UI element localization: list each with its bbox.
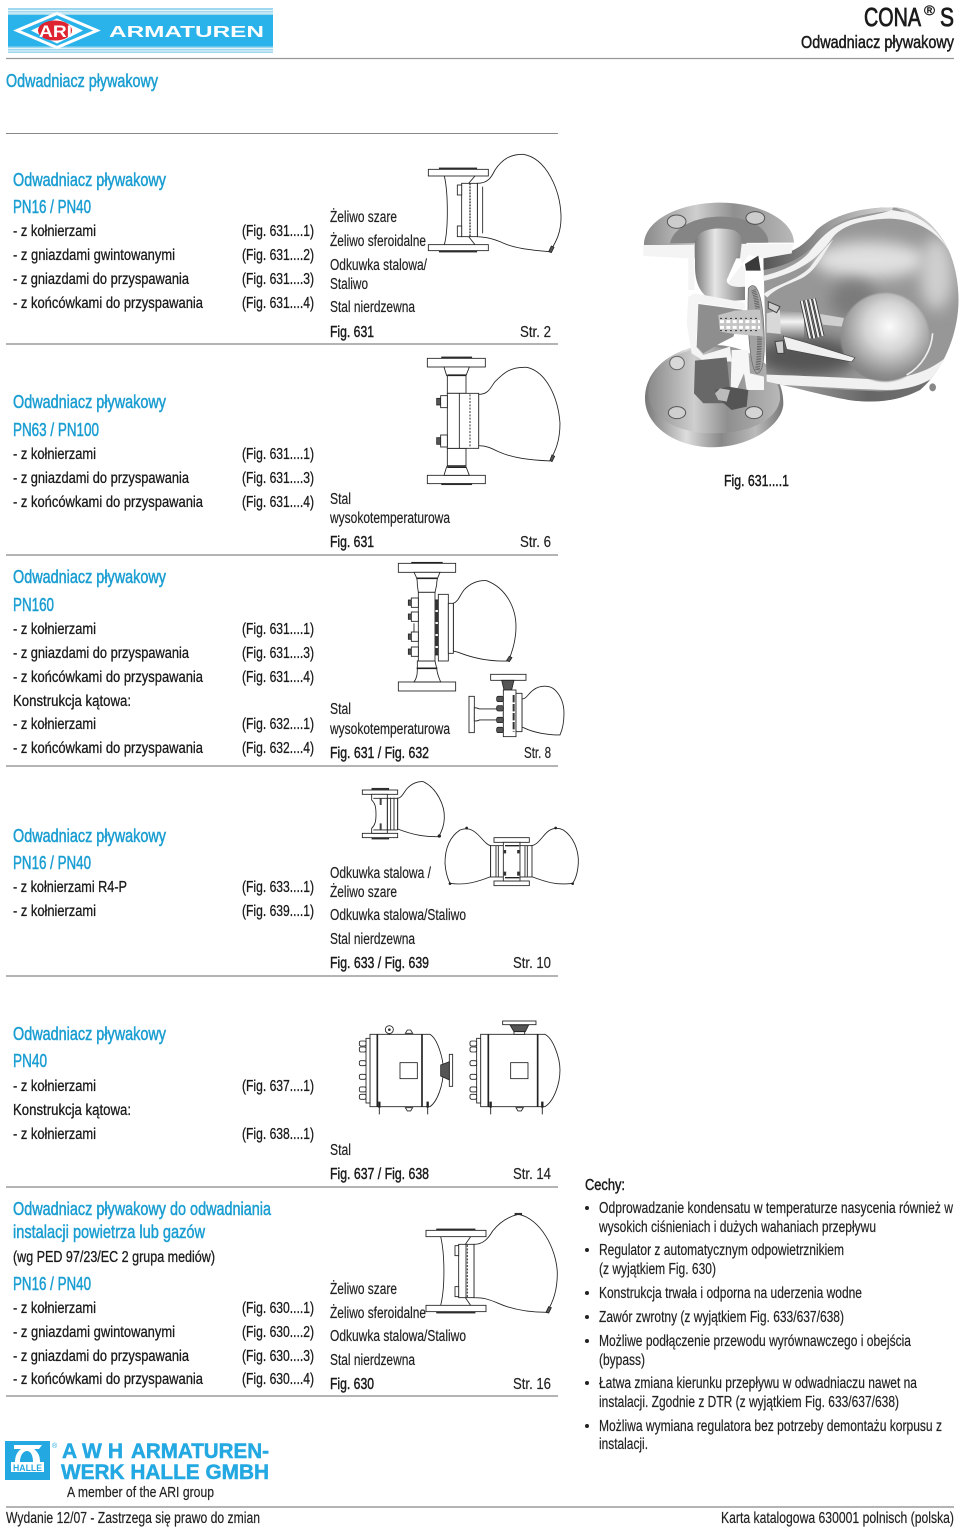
pressure class: PN16 / PN40 (13, 853, 91, 873)
header title: CONA (864, 2, 921, 32)
variants list: (Fig. 630....3) (242, 1348, 314, 1365)
variants list: - z gniazdami do przyspawania (13, 1348, 189, 1365)
feature: condensate (585, 1200, 954, 1236)
figure and page reference (330, 1166, 551, 1183)
figure and page reference (330, 324, 551, 341)
materials: wysokotemperaturowa (329, 721, 450, 738)
materials: Stal nierdzewna (330, 299, 415, 316)
heading: Odwadniacz pływakowy (13, 170, 166, 190)
logo: AWH Armaturenwerk Halle: AWH (62, 1440, 123, 1463)
feature: bypass (585, 1333, 911, 1369)
product photo: cutaway of float trap (643, 203, 960, 447)
heading: Odwadniacz pływakowy (13, 567, 166, 587)
divider plate (731, 350, 764, 390)
variants list (13, 446, 314, 511)
figure and page reference: Fig. 631 / Fig. 632 (330, 745, 429, 762)
variants list: (Fig. 631....3) (242, 271, 314, 288)
variants list: (Fig. 631....3) (242, 645, 314, 662)
panel: Fig. 630 air and gas drain (13, 1199, 557, 1393)
pressure class: PN40 (13, 1051, 47, 1071)
variants list: (Fig. 639....1) (242, 903, 314, 920)
materials: Stal (330, 491, 351, 508)
bulb upper outer wall (763, 207, 893, 270)
diagram: Fig. 631 high pressure outline (427, 357, 560, 485)
icon: Halle mark: HALLE (13, 1463, 42, 1473)
variants list: (Fig. 631....2) (242, 247, 314, 264)
variants list: (Fig. 630....2) (242, 1324, 314, 1341)
materials: Żeliwo szare (330, 883, 397, 901)
panel: PN16/PN40 Fig. 633/639 (13, 782, 578, 972)
feature: regulator replacement (585, 1418, 942, 1453)
figure and page reference (330, 955, 551, 972)
panel: PN16/PN40 Fig. 631 (13, 154, 561, 341)
variants list: - z kołnierzami (13, 903, 96, 920)
directive note: (wg PED 97/23/EC 2 grupa mediów) (13, 1249, 215, 1266)
variants list: (Fig. 638....1) (242, 1126, 314, 1143)
variants list (13, 223, 314, 312)
materials (329, 491, 450, 527)
variants list: - z końcówkami do przyspawania (13, 494, 203, 511)
figure and page reference: Fig. 631 (330, 324, 374, 341)
pressure class: PN63 / PN100 (13, 420, 99, 440)
variants list: - z gniazdami do przyspawania (13, 645, 189, 662)
diagram: Fig. 631 and Fig. 632 outlines (398, 562, 564, 737)
logo: ARI Armaturen (8, 8, 273, 53)
variants list: - z końcówkami do przyspawania (13, 669, 203, 686)
logo: AWH Armaturenwerk Halle: ARMATUREN- (131, 1440, 269, 1463)
variants list: - z końcówkami do przyspawania (13, 1371, 203, 1388)
variants list: (Fig. 637....1) (242, 1078, 314, 1095)
variants list: - z kołnierzami (13, 1078, 96, 1095)
materials: Odkuwka stalowa/Staliwo (330, 907, 466, 924)
variants list: - z kołnierzami (13, 1126, 96, 1143)
lower chamber wall (687, 293, 745, 362)
variants list: (Fig. 631....1) (242, 621, 314, 638)
feature: check valve: Zawór zwrotny (z wyjątkiem Fig. 633/637/638) (599, 1309, 844, 1326)
variants list: Konstrukcja kątowa: (13, 1102, 131, 1119)
feature: regulator: Regulator z automatycznym odpowietrznikiem (599, 1242, 844, 1259)
figure and page reference: Str. 2 (520, 324, 551, 341)
bellows (802, 299, 844, 338)
variants list: - z kołnierzami (13, 1300, 96, 1317)
pressure class: PN160 (13, 595, 54, 615)
variants list: - z kołnierzami R4-P (13, 879, 127, 896)
materials: Odkuwka stalowa/ (330, 257, 428, 274)
feature: regulator (585, 1242, 844, 1278)
photo caption: Fig. 631....1 (724, 473, 789, 490)
materials (330, 865, 466, 948)
materials: Staliwo (330, 276, 368, 293)
variants list: - z gniazdami do przyspawania (13, 470, 189, 487)
logo: AWH Armaturenwerk Halle: A member of the ARI group (67, 1484, 214, 1501)
feature: construction: Konstrukcja trwała i odporna na uderzenia wodne (599, 1285, 862, 1302)
features heading: Cechy: (585, 1177, 625, 1194)
variants list: (Fig. 630....1) (242, 1300, 314, 1317)
materials: Stal nierdzewna (330, 1352, 415, 1369)
materials (330, 1280, 466, 1369)
materials (329, 701, 450, 738)
variants list: (Fig. 630....4) (242, 1371, 314, 1388)
variants list: - z gniazdami gwintowanymi (13, 247, 175, 264)
variants list (13, 1300, 314, 1388)
variants list: - z gniazdami do przyspawania (13, 271, 189, 288)
figure and page reference: Str. 6 (520, 534, 551, 551)
bottom flange (645, 345, 783, 447)
diagram: Fig. 633 and Fig. 639 outlines (362, 782, 578, 886)
variants list: (Fig. 632....1) (242, 716, 314, 733)
figure and page reference: Str. 14 (513, 1166, 551, 1183)
feature: regulator: (z wyjątkiem Fig. 630) (599, 1261, 716, 1278)
strainer (718, 309, 763, 337)
icon: Halle mark: ® (52, 1442, 58, 1450)
heading (13, 1199, 272, 1242)
icon: Halle mark (5, 1441, 58, 1480)
float lever (783, 336, 855, 362)
variants list: - z kołnierzami (13, 621, 96, 638)
pressure class: PN16 / PN40 (13, 1274, 91, 1294)
variants list: Konstrukcja kątowa: (13, 693, 131, 710)
materials: Żeliwo sferoidalne (330, 232, 426, 250)
materials (330, 208, 428, 316)
diagram: Fig. 630 outline (426, 1213, 557, 1313)
bolts (768, 302, 784, 353)
variants list: - z kołnierzami (13, 223, 96, 240)
variants list: (Fig. 632....4) (242, 740, 314, 757)
panel: PN160 (13, 562, 564, 762)
inlet passage (695, 228, 745, 302)
header title: ® (924, 2, 936, 18)
diagram: Fig. 637 and Fig. 638 outlines (359, 1021, 560, 1114)
variants list: (Fig. 631....4) (242, 295, 314, 312)
feature: condensate: wysokich ciśnieniach i dużych wahaniach przepływu (598, 1219, 876, 1236)
figure and page reference (330, 745, 551, 762)
serrated disc (748, 286, 764, 373)
bulb white wall (764, 210, 948, 281)
materials: Stal (330, 701, 351, 718)
footer: edition note: Wydanie 12/07 - Zastrzega się prawo do zmian (6, 1510, 260, 1527)
variants list: (Fig. 631....4) (242, 669, 314, 686)
logo: ARI Armaturen: ARMATUREN (109, 24, 264, 41)
figure and page reference: Fig. 631 (330, 534, 374, 551)
figure and page reference: Str. 8 (524, 745, 551, 762)
variants list: (Fig. 631....1) (242, 223, 314, 240)
page heading: Odwadniacz pływakowy (6, 71, 158, 91)
heading: instalacji powietrza lub gazów (13, 1222, 206, 1242)
inner sweep (763, 239, 833, 297)
variants list: - z kołnierzami (13, 446, 96, 463)
heading: Odwadniacz pływakowy do odwadniania (13, 1199, 272, 1219)
variants list: - z kołnierzami (13, 716, 96, 733)
bulb body (763, 208, 958, 402)
heading: Odwadniacz pływakowy (13, 826, 166, 846)
pressure class: PN16 / PN40 (13, 197, 91, 217)
header title: S (940, 2, 954, 32)
materials: Żeliwo szare (330, 1280, 397, 1298)
variants list (13, 879, 314, 920)
variants list: (Fig. 631....1) (242, 446, 314, 463)
materials: Stal (330, 1142, 351, 1159)
diagram: Fig. 631 outline (428, 154, 561, 253)
variants list: - z gniazdami gwintowanymi (13, 1324, 175, 1341)
variants list: (Fig. 631....4) (242, 494, 314, 511)
seal block (745, 256, 761, 271)
figure and page reference: Fig. 633 / Fig. 639 (330, 955, 429, 972)
regulator cylinder (767, 310, 804, 338)
panel: PN40 Fig. 637/638 (13, 1021, 560, 1183)
header title (801, 2, 954, 52)
figure and page reference: Str. 10 (513, 955, 551, 972)
figure and page reference (330, 1376, 551, 1393)
variants list: (Fig. 631....3) (242, 470, 314, 487)
variants list (13, 1078, 314, 1143)
feature: bypass: (bypass) (599, 1352, 645, 1369)
materials: Odkuwka stalowa / (330, 865, 432, 882)
materials: Odkuwka stalowa/Staliwo (330, 1328, 466, 1345)
materials: Żeliwo sferoidalne (330, 1304, 426, 1322)
figure and page reference (330, 534, 551, 551)
lower white wall (766, 359, 944, 390)
panel: PN63/PN100 (13, 357, 560, 551)
heading: Odwadniacz pływakowy (13, 392, 166, 412)
materials: Żeliwo szare (330, 208, 397, 226)
materials: Stal nierdzewna (330, 931, 415, 948)
figure and page reference: Fig. 630 (330, 1376, 374, 1393)
top flange (643, 203, 794, 290)
pivot (715, 387, 748, 410)
logo: AWH Armaturenwerk Halle (5, 1440, 269, 1501)
lower outer wall (785, 376, 933, 402)
heading: Odwadniacz pływakowy (13, 1024, 166, 1044)
logo: ARI Armaturen: ARI (39, 22, 72, 41)
variants list: (Fig. 633....1) (242, 879, 314, 896)
panel: features (585, 1177, 954, 1453)
feature: flow direction (585, 1375, 917, 1411)
variants list (13, 621, 314, 757)
figure and page reference: Str. 16 (513, 1376, 551, 1393)
float ball (841, 293, 933, 382)
figure and page reference: Fig. 637 / Fig. 638 (330, 1166, 429, 1183)
variants list: - z końcówkami do przyspawania (13, 295, 203, 312)
materials: wysokotemperaturowa (329, 510, 450, 527)
logo: AWH Armaturenwerk Halle: WERK HALLE GMBH (61, 1461, 269, 1484)
drain plug (929, 383, 936, 391)
variants list: - z końcówkami do przyspawania (13, 740, 203, 757)
feature: regulator replacement: instalacji. (599, 1436, 648, 1453)
